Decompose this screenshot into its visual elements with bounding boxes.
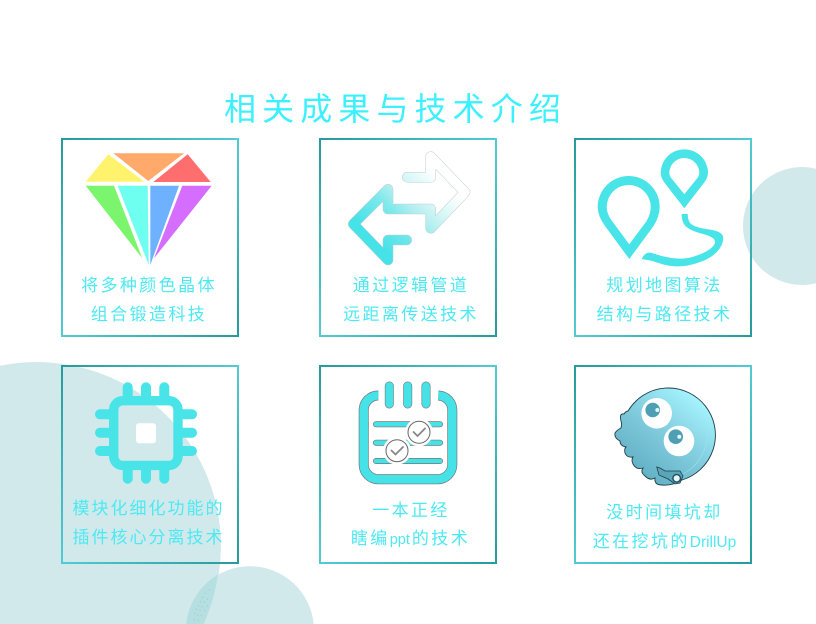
panel: modular chip [62,366,238,563]
caption: 一本正经 [372,501,450,520]
caption: 规划地图算法 [606,276,723,295]
panel: presentation calendar [320,366,496,563]
caption [81,276,217,324]
caption [593,503,736,551]
icon: calendar with checks [364,386,452,479]
icon: chip [100,387,192,479]
panel: map route [575,139,751,336]
panel border [320,139,496,336]
caption: 瞎编ppt的技术 [351,529,470,548]
caption: 远距离传送技术 [343,305,479,324]
caption: 插件核心分离技术 [72,528,224,547]
title: 相关成果与技术介绍 [224,91,567,127]
panel border [62,366,238,563]
caption: 将多种颜色晶体 [81,276,217,295]
icon: exchange arrows [353,157,465,260]
panel: gem crystal [62,139,238,336]
panel border [62,139,238,336]
caption: 组合锻造科技 [91,305,207,324]
caption: 还在挖坑的DrillUp [593,532,736,551]
caption [343,276,479,324]
icon: octopus mascot [615,388,715,485]
caption [597,276,732,324]
panel: DrillUp mascot [575,366,751,563]
caption: 没时间填坑却 [606,503,723,522]
panel border [575,139,751,336]
caption [351,501,470,548]
caption: 结构与路径技术 [597,305,732,324]
panel: logic pipeline [320,139,496,336]
caption [72,499,224,547]
panel border [575,366,751,563]
caption: 通过逻辑管道 [353,276,469,295]
background circles [0,167,816,624]
icon: rainbow diamond [86,153,212,265]
icon: map pins and route [598,149,723,266]
caption: 模块化细化功能的 [72,499,224,518]
panel border [320,366,496,563]
